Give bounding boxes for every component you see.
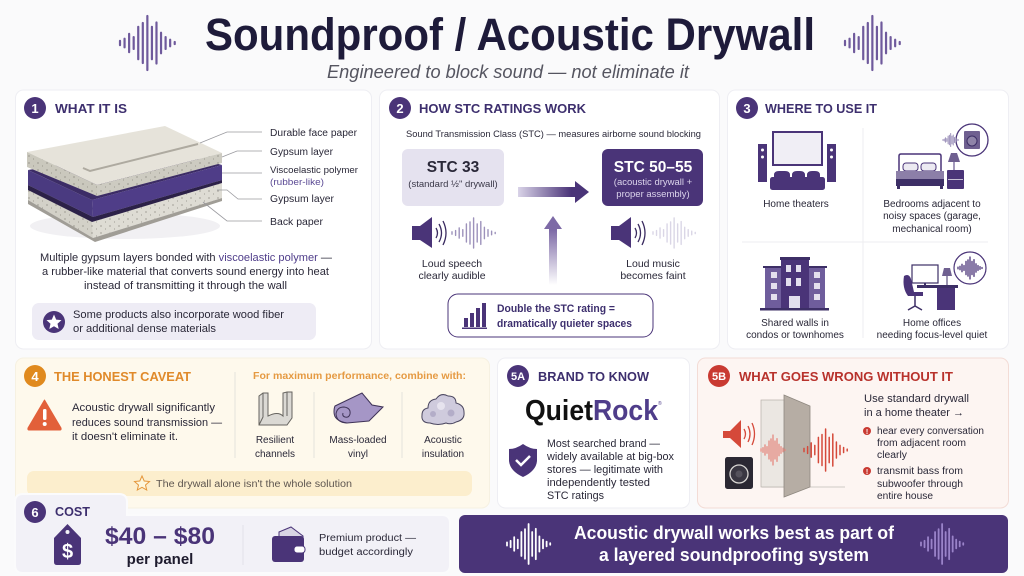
STC 33 box: (standard ½" drywall) xyxy=(408,179,498,190)
caption: home theaters: Home theaters xyxy=(763,199,829,210)
description text: a rubber-like material that converts sound energy into heat xyxy=(42,266,329,278)
layer labels: Durable face paper xyxy=(270,128,358,139)
caption: acoustic insulation: Acoustic xyxy=(424,435,462,446)
caption: resilient channels xyxy=(255,435,295,460)
price range: $40 – $80 xyxy=(105,523,215,550)
panel: cost xyxy=(15,494,450,573)
STC definition: Sound Transmission Class (STC) — measures airborne sound blocking xyxy=(406,129,701,140)
badge 2 xyxy=(389,97,411,119)
STC 50-55 box xyxy=(602,149,703,206)
bullet: hear every conversation: hear every conversation xyxy=(877,426,984,437)
panel: what it is xyxy=(16,90,372,349)
icon: bedroom with noise xyxy=(896,124,988,189)
icon: warning triangle xyxy=(28,400,61,430)
badge 6: 6 xyxy=(31,505,39,520)
brand description: widely available at big-box xyxy=(546,451,674,463)
layer labels: (rubber-like) xyxy=(270,177,324,188)
per panel: per panel xyxy=(127,551,193,568)
arrow: upward xyxy=(544,216,562,285)
caption: shared walls xyxy=(746,318,844,341)
caption: home offices xyxy=(877,318,988,341)
bullet: transmit bass: subwoofer through xyxy=(877,479,963,490)
caption: loud speech xyxy=(418,258,486,282)
QuietRock logo: ® xyxy=(658,400,662,407)
icon: acoustic insulation xyxy=(422,395,464,424)
banner waveform left xyxy=(507,524,550,564)
heading: cost: COST xyxy=(55,504,90,519)
caption: loud speech: Loud speech xyxy=(422,258,482,270)
description text xyxy=(40,252,332,292)
caption: mass-loaded vinyl xyxy=(329,435,387,460)
caption: resilient channels: channels xyxy=(255,449,295,460)
badge 4 xyxy=(24,365,46,387)
speaker with faint waves xyxy=(611,217,695,248)
panel: the honest caveat xyxy=(16,358,490,508)
header waveform right xyxy=(845,16,900,70)
badge 5A xyxy=(507,365,529,387)
badge 1: 1 xyxy=(31,101,39,116)
bullet: transmit bass: entire house xyxy=(877,491,933,502)
caption: shared walls: Shared walls in xyxy=(761,318,829,329)
heading: how STC ratings work: HOW STC RATINGS WORK xyxy=(419,101,587,116)
badge 5B xyxy=(708,365,730,387)
icon: mass-loaded vinyl xyxy=(334,393,383,423)
caption: loud music xyxy=(620,258,686,282)
title: Soundproof / Acoustic Drywall xyxy=(205,9,815,60)
caveat text: it doesn't eliminate it. xyxy=(72,431,178,443)
heading: what goes wrong: WHAT GOES WRONG WITHOUT IT xyxy=(739,369,953,384)
layer labels: Gypsum layer xyxy=(270,147,334,158)
icon: price tag xyxy=(54,524,81,565)
bullet: transmit bass: ! xyxy=(866,469,868,476)
caveat text: Acoustic drywall significantly xyxy=(72,402,216,414)
heading: where to use it: WHERE TO USE IT xyxy=(765,101,877,116)
caption: shared walls: condos or townhomes xyxy=(746,330,844,341)
scenario text xyxy=(864,393,969,419)
caption: home offices: Home offices xyxy=(903,318,961,329)
QuietRock logo: QuietRock xyxy=(525,395,659,427)
caption: loud music: Loud music xyxy=(626,258,680,270)
STC 50-55 box: STC 50–55 xyxy=(614,159,693,176)
bullet: hear every conversation xyxy=(863,426,984,461)
banner: layered system xyxy=(459,515,1008,573)
badge 6 xyxy=(24,501,46,523)
layer labels: Viscoelastic polymer xyxy=(270,165,358,176)
strip: drywall alone: The drywall alone isn't the whole solution xyxy=(156,479,352,490)
icon: apartment building xyxy=(760,257,829,310)
heading: what it is: WHAT IT IS xyxy=(55,101,127,116)
budget note: budget accordingly xyxy=(319,547,413,558)
caveat text xyxy=(72,402,222,443)
icon: wallet xyxy=(272,527,305,562)
note box xyxy=(32,303,316,340)
bullet: hear every conversation: ! xyxy=(866,429,868,436)
wall and sound illustration xyxy=(723,395,847,497)
panel: how STC ratings work xyxy=(380,90,720,349)
icon: home theater xyxy=(758,132,836,190)
caption: mass-loaded vinyl: vinyl xyxy=(348,449,368,460)
panel: where to use it xyxy=(728,90,1008,349)
brand description: independently tested xyxy=(547,477,650,489)
badge 1 xyxy=(24,97,46,119)
panel: brand to know xyxy=(498,358,690,508)
strip: drywall alone xyxy=(27,471,472,496)
description text: instead of transmitting it through the wall xyxy=(84,280,287,292)
banner waveform right xyxy=(921,524,963,564)
subtitle: Engineered to block sound — not eliminate it xyxy=(327,62,690,82)
layered drywall illustration xyxy=(27,126,222,242)
callout: double the STC rating: Double the STC rating = xyxy=(497,303,615,315)
caption: bedrooms: mechanical room) xyxy=(892,224,972,235)
STC 50-55 box: (acoustic drywall + xyxy=(614,177,693,188)
panel: what goes wrong without it xyxy=(698,358,1008,508)
brand description: STC ratings xyxy=(547,490,604,502)
heading: brand to know: BRAND TO KNOW xyxy=(538,369,650,384)
budget note: Premium product — xyxy=(319,533,416,544)
scenario text: in a home theater → xyxy=(864,407,964,419)
bullet: hear every conversation: from adjacent room xyxy=(877,438,966,449)
caption: acoustic insulation xyxy=(422,435,464,460)
caption: resilient channels: Resilient xyxy=(256,435,294,446)
layer labels: Back paper xyxy=(270,217,324,228)
caption: loud music: becomes faint xyxy=(620,270,686,282)
icon: price tag: $ xyxy=(62,541,73,563)
leader lines xyxy=(200,132,262,221)
caption: bedrooms: noisy spaces (garage, xyxy=(883,211,981,222)
badge 2: 2 xyxy=(396,101,404,116)
caption: bedrooms: Bedrooms adjacent to xyxy=(883,199,981,210)
icon: resilient channel xyxy=(259,392,292,425)
note box: Some products also incorporate wood fiber xyxy=(73,309,284,321)
caption: home offices: needing focus-level quiet xyxy=(877,330,988,341)
scenario text: Use standard drywall xyxy=(864,393,969,405)
caption: bedrooms xyxy=(883,199,981,235)
bullet: transmit bass xyxy=(863,466,963,502)
arrow: horizontal xyxy=(518,181,589,203)
caption: mass-loaded vinyl: Mass-loaded xyxy=(329,435,387,446)
callout: double the STC rating xyxy=(448,294,653,337)
callout: double the STC rating: dramatically quieter spaces xyxy=(497,318,632,330)
budget note xyxy=(319,533,416,558)
STC 33 box: STC 33 xyxy=(427,159,480,176)
caption: loud speech: clearly audible xyxy=(418,270,486,282)
badge 3: 3 xyxy=(743,101,751,116)
bullet: hear every conversation: clearly xyxy=(877,450,907,461)
STC 50-55 box: proper assembly) xyxy=(616,189,690,200)
layer labels xyxy=(270,128,358,228)
bullet: transmit bass: transmit bass from xyxy=(877,466,963,477)
description text: Multiple gypsum layers bonded with viscoelastic polymer — xyxy=(40,252,332,264)
badge 5A: 5A xyxy=(511,371,525,383)
badge 5B: 5B xyxy=(712,371,726,383)
heading: the honest caveat: THE HONEST CAVEAT xyxy=(54,369,191,384)
brand description: stores — legitimate with xyxy=(547,464,663,476)
banner text xyxy=(574,523,895,565)
subheading: combine with: For maximum performance, combine with: xyxy=(253,370,466,382)
brand description xyxy=(546,438,674,502)
STC 33 box xyxy=(402,149,504,206)
icon: shield check xyxy=(509,444,537,477)
caveat text: reduces sound transmission — xyxy=(72,417,222,429)
badge 4: 4 xyxy=(31,369,39,384)
speaker with loud waves xyxy=(412,217,495,248)
caption: acoustic insulation: insulation xyxy=(422,449,464,460)
banner text: Acoustic drywall works best as part of xyxy=(574,523,895,543)
header waveform left xyxy=(120,16,175,70)
brand description: Most searched brand — xyxy=(547,438,660,450)
badge 3 xyxy=(736,97,758,119)
note box: or additional dense materials xyxy=(73,323,217,335)
icon: home office xyxy=(904,252,986,310)
layer labels: Gypsum layer xyxy=(270,194,335,205)
banner text: a layered soundproofing system xyxy=(599,545,869,565)
